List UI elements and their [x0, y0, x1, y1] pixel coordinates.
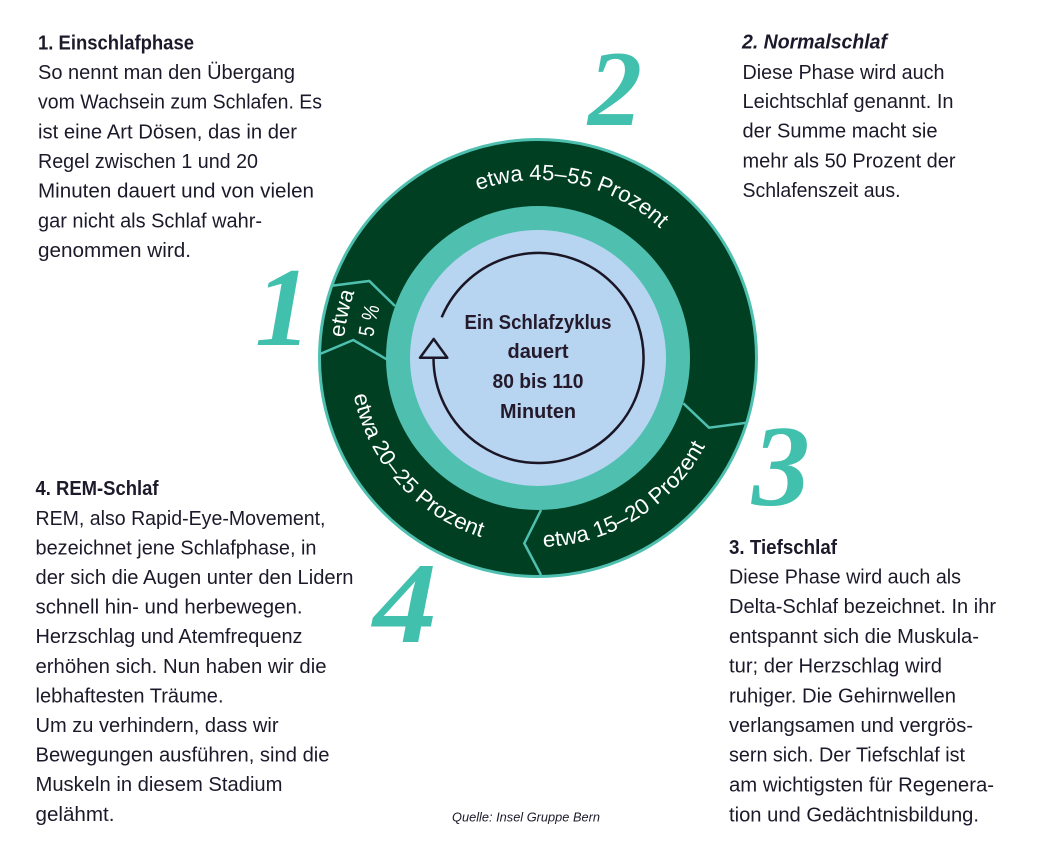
text block: 2. Normalschlaf: [741, 32, 956, 202]
text block: 4. REM-Schlaf: [36, 478, 354, 826]
arrow: cycle direction: [420, 253, 643, 463]
text block: 3. Tiefschlaf: 3. Tiefschlaf: [729, 537, 837, 559]
text block: 3. Tiefschlaf: verlangsamen und vergrös-: [729, 715, 973, 737]
text block: 2. Normalschlaf: Schlafenszeit aus.: [742, 180, 900, 202]
text block: 2. Normalschlaf: 2. Normalschlaf: [741, 32, 889, 54]
numeral 2: 2: [586, 30, 642, 149]
centre text: Ein Schlafzyklus: [464, 312, 612, 334]
text block: 4. REM-Schlaf: lebhaftesten Träume.: [36, 685, 224, 707]
text block: 2. Normalschlaf: Leichtschlaf genannt. In: [742, 91, 954, 113]
segment dividers: [320, 281, 747, 575]
text block: 4. REM-Schlaf: Um zu verhindern, dass wir: [36, 715, 279, 737]
centre text: dauert: [508, 341, 569, 363]
text block: 4. REM-Schlaf: Bewegungen ausführen, sind die: [36, 745, 330, 767]
text block: 1. Einschlafphase: ist eine Art Dösen, das in der: [38, 121, 297, 143]
label: phase 1 share: 5 %: [358, 306, 379, 336]
text block: 2. Normalschlaf: der Summe macht sie: [742, 121, 938, 143]
centre text: 80 bis 110: [492, 371, 584, 393]
text block: 4. REM-Schlaf: erhöhen sich. Nun haben wir die: [36, 656, 326, 678]
text block: 1. Einschlafphase: So nennt man den Übergang: [38, 62, 295, 84]
label: phase 3 share: etwa 15–20 Prozent: [544, 440, 706, 547]
text block: 1. Einschlafphase: Minuten dauert und von vielen: [38, 181, 314, 203]
text block: 4. REM-Schlaf: der sich die Augen unter den Lidern: [36, 567, 354, 589]
light blue centre disc: [410, 230, 666, 486]
text block: 3. Tiefschlaf: [729, 537, 996, 826]
text block: 4. REM-Schlaf: Muskeln in diesem Stadium: [36, 774, 282, 796]
label: phase 4 share: etwa 20–25 Prozent: [354, 394, 484, 538]
text block: 2. Normalschlaf: Diese Phase wird auch: [742, 62, 944, 84]
text block: 4. REM-Schlaf: Herzschlag und Atemfrequenz: [36, 626, 302, 648]
text block: 3. Tiefschlaf: sern sich. Der Tiefschlaf ist: [729, 745, 965, 767]
text block: 3. Tiefschlaf: Delta-Schlaf bezeichnet. In ihr: [729, 596, 996, 618]
numeral 4: 4: [371, 539, 437, 668]
centre text: [464, 312, 612, 423]
text block: 3. Tiefschlaf: tur; der Herzschlag wird: [729, 656, 942, 678]
teal inner ring: [386, 206, 690, 510]
centre text: Minuten: [500, 401, 576, 423]
text block: 3. Tiefschlaf: ruhiger. Die Gehirnwellen: [729, 686, 956, 708]
text block: 3. Tiefschlaf: tion und Gedächtnisbildung.: [729, 804, 979, 826]
text block: 3. Tiefschlaf: am wichtigsten für Regenera-: [729, 774, 994, 796]
label: phase 1 share: etwa: [332, 290, 354, 336]
outer dark ring: [320, 140, 756, 576]
text block: 1. Einschlafphase: Regel zwischen 1 und 20: [38, 151, 258, 173]
text block: 3. Tiefschlaf: Diese Phase wird auch als: [729, 566, 961, 588]
text block: 4. REM-Schlaf: 4. REM-Schlaf: [36, 478, 159, 500]
text block: 4. REM-Schlaf: gelähmt.: [36, 804, 114, 826]
text block: 4. REM-Schlaf: bezeichnet jene Schlafphase, in: [36, 538, 316, 560]
numeral 1: 1: [255, 246, 311, 370]
label: phase 2 share: etwa 45–55 Prozent: [476, 164, 668, 228]
text block: 4. REM-Schlaf: REM, also Rapid-Eye-Movement,: [36, 508, 326, 530]
text block: 2. Normalschlaf: mehr als 50 Prozent der: [742, 151, 956, 173]
text block: 1. Einschlafphase: 1. Einschlafphase: [38, 32, 194, 54]
panel: sleep cycle ring diagram: [318, 138, 758, 578]
text block: 1. Einschlafphase: gar nicht als Schlaf wahr-: [38, 210, 262, 232]
source note: Quelle: Insel Gruppe Bern: [452, 810, 600, 824]
text block: 1. Einschlafphase: [38, 32, 322, 262]
text block: 4. REM-Schlaf: schnell hin- und herbewegen.: [36, 596, 302, 618]
text block: 1. Einschlafphase: vom Wachsein zum Schlafen. Es: [38, 92, 322, 114]
text block: 3. Tiefschlaf: entspannt sich die Muskula-: [729, 626, 979, 648]
text block: 1. Einschlafphase: genommen wird.: [38, 240, 191, 262]
label: phase 1 share: [332, 290, 379, 336]
numeral 3: 3: [751, 403, 810, 531]
